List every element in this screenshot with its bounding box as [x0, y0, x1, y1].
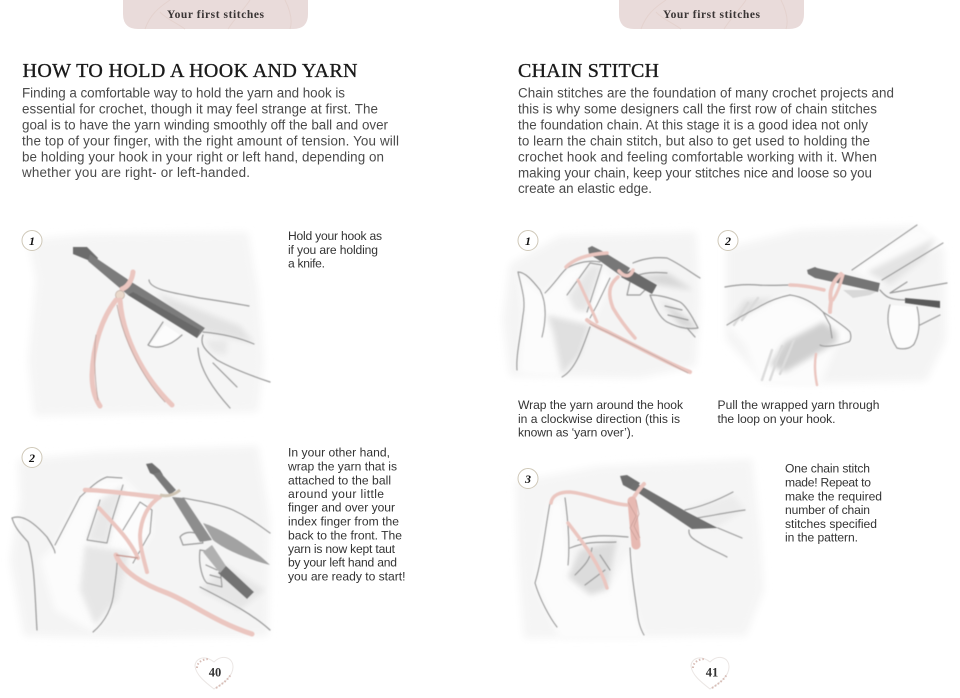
caption: right step 2: the loop on your hook.	[718, 412, 836, 426]
intro text: how to hold	[21, 86, 399, 180]
caption: right step 3	[785, 461, 882, 544]
step number 2: right page: 2	[724, 234, 731, 248]
step number 1: left page: 1	[29, 234, 35, 248]
page number heart: 41: 41	[706, 666, 718, 680]
caption: left step 1: if you are holding	[288, 243, 378, 257]
caption: right step 1: known as ‘yarn over’).	[518, 426, 634, 440]
step number 3: right page: 3	[524, 472, 531, 486]
step number 2: right page	[718, 230, 738, 250]
step number 1: right page: 1	[525, 234, 531, 248]
step number 1: right page	[518, 230, 538, 250]
intro text: how to hold: goal is to have the yarn winding smoothly off the ball and over	[22, 118, 389, 133]
caption: left step 2: finger and over your	[288, 501, 395, 515]
step number 1: left page	[22, 230, 42, 250]
caption: left step 2: wrap the yarn that is	[287, 460, 397, 474]
intro text: how to hold: Finding a comfortable way to hold the yarn and hook is	[22, 86, 345, 101]
intro text: chain stitch: Chain stitches are the foundation of many crochet projects and	[518, 86, 894, 101]
illustration: left step 1, holding the hook	[28, 232, 270, 416]
intro text: chain stitch: this is why some designers call the first row of chain stitches	[518, 102, 877, 117]
caption: right step 3: make the required	[785, 489, 882, 503]
intro text: chain stitch: the foundation chain. At this stage it is a good idea not only	[518, 118, 868, 133]
intro text: how to hold: the top of your finger, with the right amount of tension. You will	[22, 133, 399, 148]
header tab: left page: Your first stitches	[167, 9, 265, 21]
caption: left step 2: yarn is now kept taut	[288, 542, 396, 556]
caption: right step 3: made! Repeat to	[785, 475, 871, 489]
header tab: right page: Your first stitches	[663, 9, 761, 21]
intro text: how to hold: whether you are right- or left-handed.	[21, 165, 250, 180]
intro text: how to hold: be holding your hook in your right or left hand, depending on	[22, 149, 384, 164]
caption: right step 1: Wrap the yarn around the hook	[518, 398, 684, 412]
caption: left step 2: back to the front. The	[288, 528, 402, 542]
page number heart: 40	[195, 657, 233, 689]
caption: left step 2: you are ready to start!	[288, 570, 406, 584]
page number heart: 40: 40	[209, 666, 221, 680]
heading: how to hold a hook and yarn: HOW TO HOLD A HOOK AND YARN	[22, 60, 358, 82]
header tab: right page	[619, 0, 804, 29]
caption: left step 1	[288, 229, 382, 271]
caption: right step 3: One chain stitch	[785, 461, 870, 475]
page number heart: 41	[691, 657, 729, 689]
intro text: chain stitch: crochet hook and feeling comfortable working with it. When	[518, 149, 877, 164]
illustration: right step 2, pulling yarn through	[725, 225, 947, 385]
illustration: right step 3, finished chain stitch	[516, 459, 764, 640]
intro text: chain stitch	[518, 86, 894, 196]
caption: right step 3: in the pattern.	[785, 530, 858, 544]
caption: left step 1: a knife.	[288, 257, 325, 271]
caption: left step 2: by your left hand and	[288, 556, 397, 570]
caption: right step 2	[718, 398, 880, 426]
caption: left step 2: In your other hand,	[288, 446, 390, 460]
heading: chain stitch: CHAIN STITCH	[518, 60, 659, 82]
caption: right step 3: number of chain	[785, 503, 870, 517]
header tab: left page	[123, 0, 308, 29]
step number 3: right page	[518, 468, 538, 488]
caption: left step 2: index finger from the	[288, 514, 399, 528]
caption: left step 1: Hold your hook as	[288, 229, 382, 243]
step number 2: left page: 2	[28, 451, 35, 465]
illustration: left step 2, wrapping the yarn	[10, 446, 270, 638]
step number 2: left page	[22, 448, 42, 468]
caption: left step 2	[287, 446, 406, 584]
caption: left step 2: attached to the ball	[288, 473, 391, 487]
caption: left step 2: around your little	[288, 487, 384, 501]
intro text: how to hold: essential for crochet, though it may feel strange at first. The	[22, 102, 378, 117]
illustration: right step 1, yarn over	[503, 232, 700, 378]
intro text: chain stitch: making your chain, keep your stitches nice and loose so you	[518, 165, 872, 180]
intro text: chain stitch: create an elastic edge.	[518, 181, 652, 196]
caption: right step 3: stitches specified	[785, 517, 877, 531]
caption: right step 1: in a clockwise direction (this is	[518, 412, 680, 426]
caption: right step 1	[518, 398, 684, 440]
caption: right step 2: Pull the wrapped yarn through	[718, 398, 880, 412]
intro text: chain stitch: to learn the chain stitch, but also to get used to holding the	[518, 133, 870, 148]
